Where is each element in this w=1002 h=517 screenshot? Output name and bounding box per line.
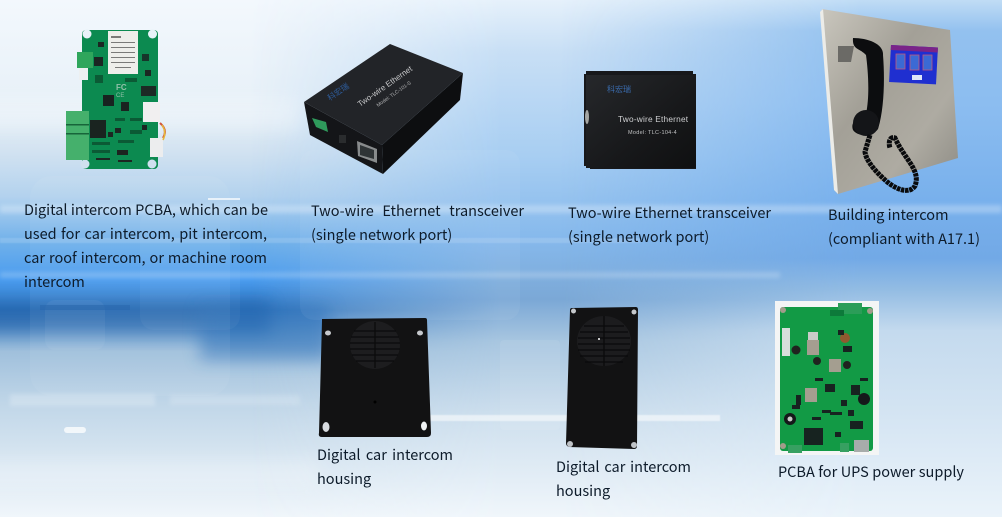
caption: two-wire transceiver, angled box: Two-wire Ethernet transceiver [311,200,524,221]
icon: two-wire Ethernet transceiver, angled box: Model: TLC-101-S [376,80,413,109]
icon: digital intercom PCBA: CE [116,93,124,99]
caption: building intercom: Building intercom [828,204,949,225]
icon: two-wire Ethernet transceiver, flat box: 科宏瑞 [607,84,631,95]
icon: two-wire Ethernet transceiver, angled box [304,44,463,174]
caption: wide car intercom housing: housing [317,468,371,489]
icon: two-wire Ethernet transceiver, flat box [584,71,696,169]
caption: digital intercom PCBA: Digital intercom PCBA, which can be [24,199,268,220]
caption: narrow car intercom housing: housing [556,480,610,501]
icon: building intercom wall panel with handset [820,9,958,194]
icon: digital car intercom housing, narrow [566,307,638,449]
caption: building intercom: (compliant with A17.1) [828,228,980,249]
caption: digital intercom PCBA [24,199,268,292]
caption: two-wire transceiver, flat box: Two-wire Ethernet transceiver [568,202,771,223]
caption: building intercom [828,204,980,249]
caption: narrow car intercom housing [556,456,691,501]
icon: digital intercom PCBA [66,30,165,169]
background: translucent rounded panels [30,150,560,430]
caption: two-wire transceiver, angled box [311,200,524,245]
caption: two-wire transceiver, flat box: (single network port) [568,226,709,247]
caption: wide car intercom housing: Digital car intercom [317,444,453,465]
icon: two-wire Ethernet transceiver, flat box: Two-wire Ethernet [618,114,689,124]
caption: wide car intercom housing [317,444,453,489]
caption: PCBA for UPS power supply: PCBA for UPS power supply [778,461,964,482]
caption: digital intercom PCBA: car roof intercom, or machine room [24,247,267,268]
caption: narrow car intercom housing: Digital car intercom [556,456,691,477]
icon: PCBA for UPS power supply [775,301,879,455]
caption: digital intercom PCBA: used for car intercom, pit intercom, [24,223,267,244]
icon: digital intercom PCBA: FC [116,83,127,92]
caption: two-wire transceiver, angled box: (single network port) [311,224,452,245]
icon: two-wire Ethernet transceiver, angled box: Two-wire Ethernet [356,64,415,109]
icon: two-wire Ethernet transceiver, flat box: Model: TLC-104-4 [628,130,677,136]
caption: digital intercom PCBA: intercom [24,271,85,292]
icon: digital car intercom housing, wide [319,318,431,437]
icon: two-wire Ethernet transceiver, angled box: 科宏瑞 [325,81,351,103]
caption: two-wire transceiver, flat box [568,202,771,247]
